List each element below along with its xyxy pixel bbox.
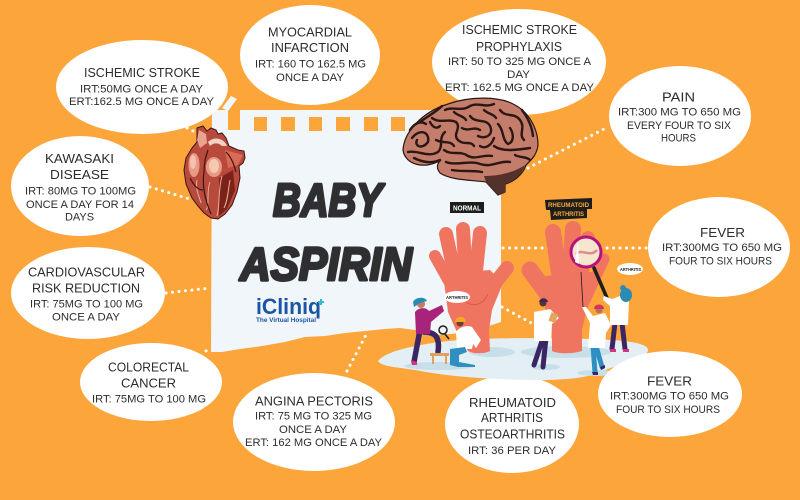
hand: rheumatoid arthritis bbox=[530, 229, 604, 353]
bubble: fever (lower) bbox=[598, 351, 742, 437]
title: Baby Aspirin bbox=[239, 174, 413, 290]
icon: anatomical heart bbox=[184, 126, 245, 219]
bubble: pain: PAIN bbox=[662, 91, 695, 105]
speech bubble: arthritis left: ARTHRITIS bbox=[446, 295, 468, 300]
person: woman with magnifier bbox=[411, 298, 449, 365]
bubble: cardiovascular risk reduction bbox=[11, 247, 165, 339]
bubble: kawasaki disease: DAYS bbox=[65, 212, 94, 224]
bubble: colorectal cancer: IRT: 75MG TO 100 MG bbox=[92, 394, 206, 406]
icon: magnifying glass with joint bbox=[571, 237, 607, 298]
bubble: ischemic stroke prophylaxis: PROPHYLAXIS bbox=[476, 40, 562, 54]
bubble: pain: EVERY FOUR TO SIX bbox=[627, 120, 732, 132]
bubble: colorectal cancer: COLORECTAL bbox=[108, 361, 189, 375]
bubble: pain: HOURS bbox=[661, 133, 696, 145]
bubble: fever (upper): FOUR TO SIX HOURS bbox=[669, 256, 772, 268]
bubble: ischemic stroke prophylaxis: DAY bbox=[507, 69, 531, 81]
bubble: ischemic stroke prophylaxis: IRT: 50 TO 325 MG ONCE A bbox=[448, 56, 592, 68]
bubble: angina pectoris: ANGINA PECTORIS bbox=[255, 395, 373, 409]
icon: brain bbox=[403, 98, 538, 195]
bubble: pain: IRT:300 MG TO 650 MG bbox=[618, 107, 741, 119]
bubble: rheumatoid arthritis osteoarthritis: IRT: 36 PER DAY bbox=[468, 445, 557, 457]
bubble: colorectal cancer bbox=[80, 343, 222, 421]
bubble: angina pectoris bbox=[233, 373, 395, 471]
speech bubble: arthritis right bbox=[617, 263, 643, 275]
speech bubble: arthritis left bbox=[444, 291, 470, 303]
bubble: kawasaki disease: DISEASE bbox=[50, 168, 109, 182]
bubble: rheumatoid arthritis osteoarthritis bbox=[445, 375, 579, 473]
bubble: fever (upper): IRT:300MG TO 650 MG bbox=[662, 242, 782, 254]
bubble: rheumatoid arthritis osteoarthritis: RHEUMATOID bbox=[469, 396, 556, 410]
bubble: cardiovascular risk reduction: IRT: 75MG TO 100 MG bbox=[30, 299, 143, 311]
bubble: cardiovascular risk reduction: RISK REDUCTION bbox=[32, 282, 140, 296]
bubble: rheumatoid arthritis osteoarthritis: OSTEOARTHRITIS bbox=[460, 428, 565, 442]
bubble: ischemic stroke prophylaxis: ERT: 162.5 MG ONCE A DAY bbox=[445, 82, 595, 94]
bubble: ischemic stroke: ERT:162.5 MG ONCE A DAY bbox=[69, 96, 215, 108]
bubble: kawasaki disease: KAWASAKI bbox=[45, 152, 114, 166]
title: Baby Aspirin: BABY bbox=[273, 174, 386, 226]
bubble: ischemic stroke: ISCHEMIC STROKE bbox=[84, 66, 200, 80]
bubble: kawasaki disease: ONCE A DAY FOR 14 bbox=[26, 199, 134, 211]
bubble: kawasaki disease bbox=[11, 136, 149, 236]
label: rheumatoid arthritis bbox=[545, 198, 592, 220]
person: doctor with clipboard bbox=[534, 298, 559, 367]
bubble: myocardial infarction: IRT: 160 TO 162.5 MG bbox=[255, 59, 366, 71]
person: kneeling doctor bbox=[450, 317, 481, 367]
torn paper panel bbox=[211, 96, 501, 352]
bubble: fever (lower): FOUR TO SIX HOURS bbox=[616, 404, 720, 416]
bubble: rheumatoid arthritis osteoarthritis: ARTHRITIS bbox=[481, 411, 543, 425]
dotted connector lines bbox=[150, 128, 648, 371]
bubble: ischemic stroke prophylaxis bbox=[432, 9, 606, 115]
bubble: angina pectoris: IRT: 75 MG TO 325 MG bbox=[255, 411, 372, 423]
title: Baby Aspirin: ASPIRIN bbox=[239, 238, 413, 290]
bubble: myocardial infarction: MYOCARDIAL bbox=[268, 26, 352, 40]
label: normal: NORMAL bbox=[453, 204, 481, 212]
bubble: myocardial infarction: INFARCTION bbox=[271, 41, 349, 55]
person: doctor with teal hair bbox=[603, 285, 632, 352]
bubble: fever (upper): FEVER bbox=[700, 226, 745, 240]
bubble: angina pectoris: ERT: 162 MG ONCE A DAY bbox=[245, 437, 383, 449]
bubble: angina pectoris: ONCE A DAY bbox=[279, 424, 348, 436]
platform under the hands bbox=[378, 338, 648, 380]
logo: iCliniq: iCliniq bbox=[256, 294, 321, 319]
speech bubble: arthritis right: ARTHRITIS bbox=[620, 267, 641, 272]
bubble: colorectal cancer: CANCER bbox=[121, 377, 176, 391]
person: doctor with pointer bbox=[581, 272, 611, 375]
bubble: fever (upper) bbox=[648, 197, 790, 297]
bubble: kawasaki disease: IRT: 80MG TO 100MG bbox=[25, 186, 136, 198]
bubble: ischemic stroke: IRT:50MG ONCE A DAY bbox=[80, 84, 204, 96]
bubble: ischemic stroke prophylaxis: ISCHEMIC STROKE bbox=[462, 23, 577, 37]
bubble: fever (lower): IRT:300MG TO 650 MG bbox=[610, 391, 729, 403]
bubble: fever (lower): FEVER bbox=[647, 375, 692, 389]
bubble: cardiovascular risk reduction: ONCE A DAY bbox=[52, 312, 121, 324]
label: rheumatoid arthritis: RHEUMATOID bbox=[548, 202, 589, 209]
bubble: ischemic stroke bbox=[56, 40, 228, 134]
bubble: cardiovascular risk reduction: CARDIOVASCULAR bbox=[28, 266, 145, 280]
label: rheumatoid arthritis: ARTHRITIS bbox=[553, 211, 585, 218]
hand: normal bbox=[435, 229, 507, 353]
bubble: myocardial infarction bbox=[240, 5, 380, 105]
bubble: pain bbox=[609, 66, 751, 166]
logo: iCliniq: The Virtual Hospital bbox=[256, 318, 316, 324]
bubble: myocardial infarction: ONCE A DAY bbox=[276, 72, 345, 84]
